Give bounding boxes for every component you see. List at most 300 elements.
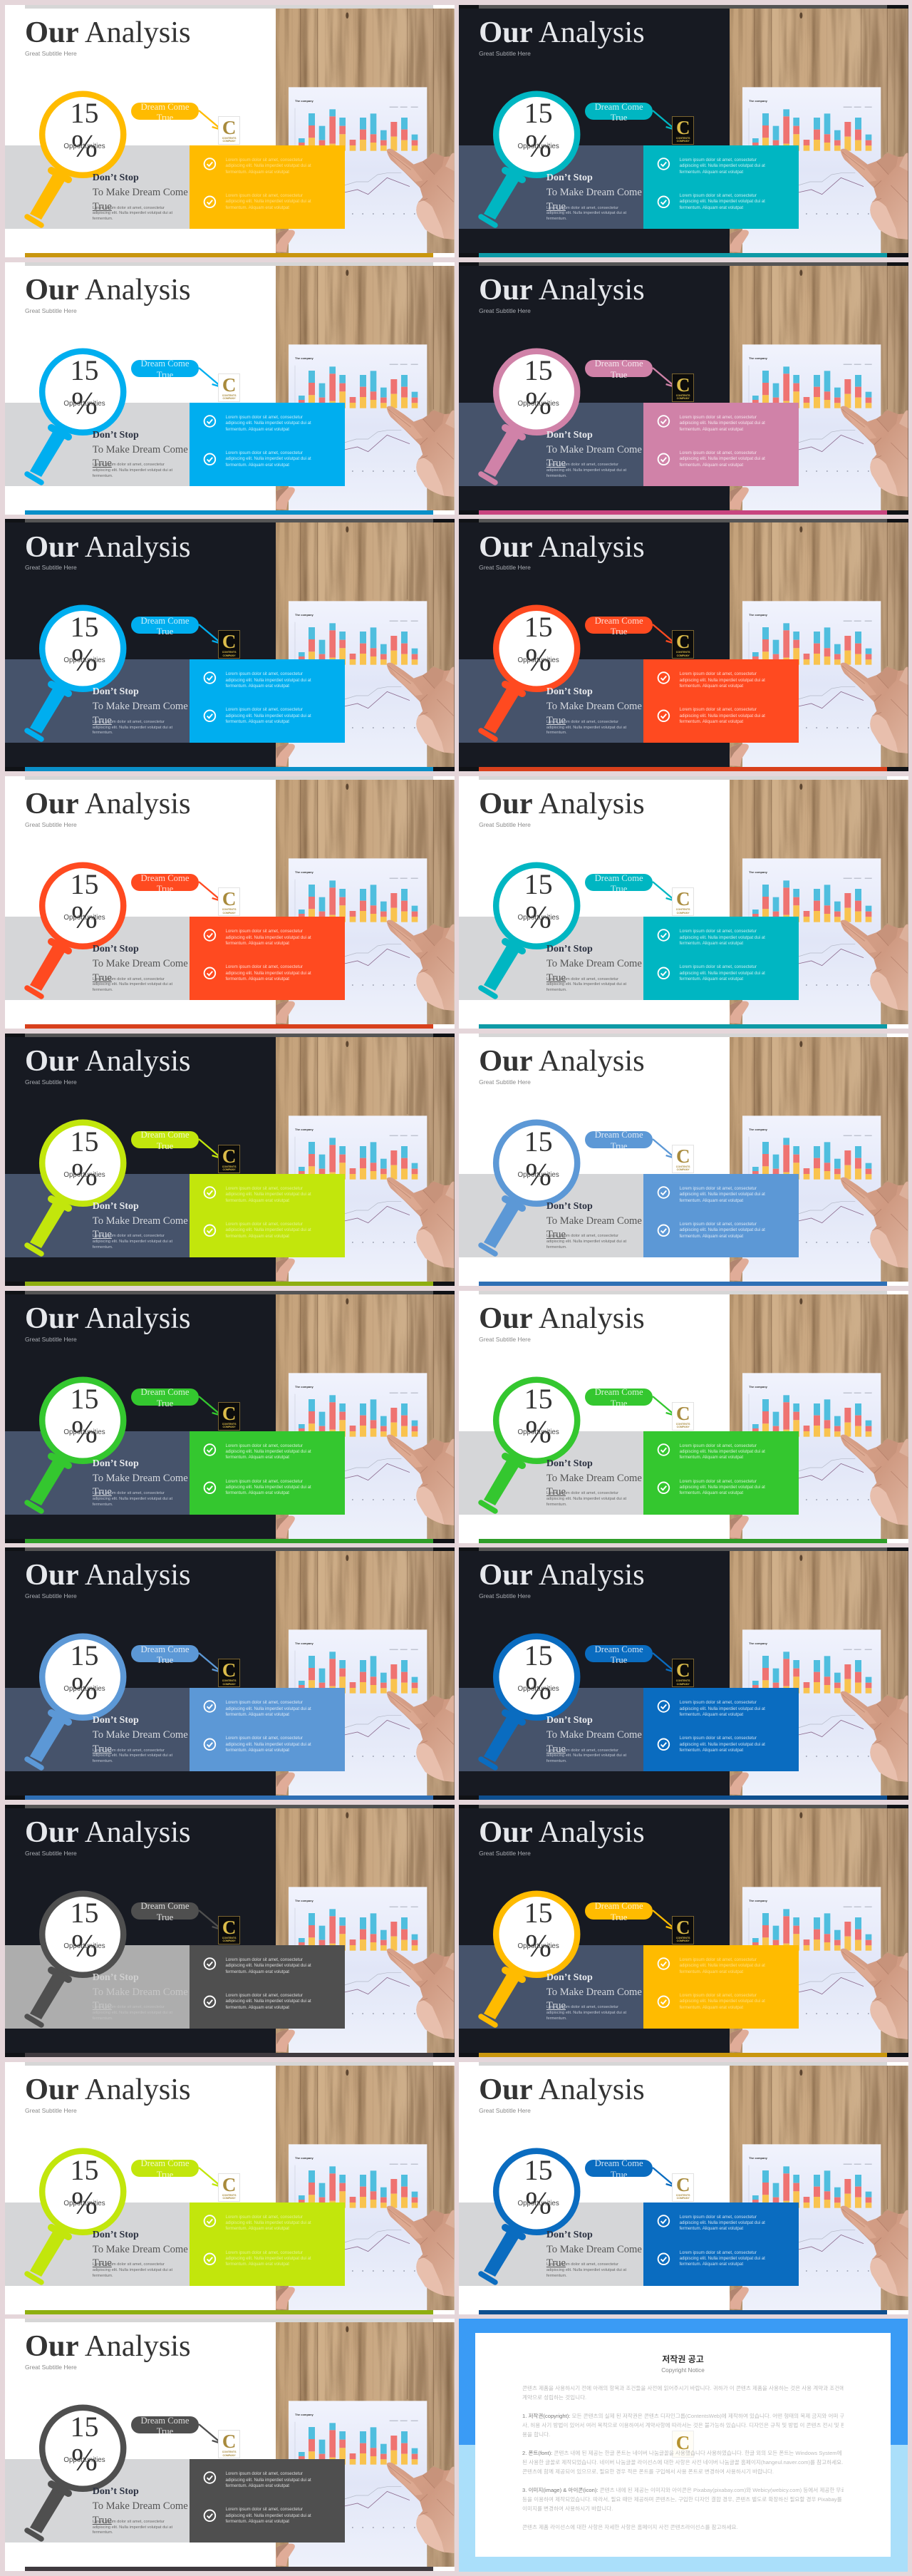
text: item 2: fermentum. Aliquam erat volutpat (225, 1748, 289, 1753)
label: Opportunities (517, 1428, 559, 1436)
text: item 1 (225, 1957, 332, 1975)
arrow (4, 2319, 455, 2571)
text: body: Lorem ipsum dolor sit amet, consectetur adipiscing elit. Nulla imperdiet volutpat dui at fermentum. (93, 2005, 172, 2021)
text: item 1: Lorem ipsum dolor sit amet, consectetur (225, 158, 303, 163)
text: to make (93, 1986, 188, 2014)
text: item 1: Lorem ipsum dolor sit amet, consectetur (225, 1443, 303, 1448)
text: item 1: adipiscing elit. Nulla imperdiet volutpat dui at (225, 1449, 311, 1454)
subtitle: Great Subtitle Here (479, 1592, 531, 1599)
icon: logo (672, 1659, 694, 1687)
icon: logo: CONTENTS (676, 1423, 690, 1426)
text: item 2 (680, 2250, 787, 2268)
clause 1 line 3: 용을 합니다. (522, 2431, 550, 2438)
text: body: Lorem ipsum dolor sit amet, consectetur adipiscing elit. Nulla imperdiet volutpat dui at fermentum. (546, 1234, 626, 1250)
panel: slide 4 pink on dark (459, 262, 908, 515)
text: item 1: Lorem ipsum dolor sit amet, consectetur (225, 2471, 303, 2476)
text: item 1: adipiscing elit. Nulla imperdiet volutpat dui at (680, 935, 765, 939)
callout text (585, 1130, 653, 1152)
callout text (595, 359, 643, 380)
text: item 2: fermentum. Aliquam erat volutpat (225, 2262, 289, 2267)
text: item 2: adipiscing elit. Nulla imperdiet volutpat dui at (225, 199, 311, 204)
text: item 1: Lorem ipsum dolor sit amet, consectetur (225, 1186, 303, 1191)
icon: magnifier (4, 1034, 455, 1286)
icon: magnifier (4, 1547, 455, 1800)
text: item 1 (680, 1700, 787, 1718)
icon: logo (218, 1401, 240, 1430)
number: 15 (524, 97, 553, 129)
text: item 2 (680, 707, 787, 726)
icons: checks (459, 1290, 908, 1542)
text: to make (93, 444, 188, 469)
photo: hand pointing at chart (276, 266, 455, 510)
callout text: Dream Come (141, 101, 190, 111)
callout text: True (157, 884, 173, 894)
text: item 1: adipiscing elit. Nulla imperdiet volutpat dui at (225, 2478, 311, 2483)
label: Opportunities (63, 400, 105, 408)
arrow (459, 1547, 908, 1800)
text: item 2: fermentum. Aliquam erat volutpat (225, 2005, 289, 2010)
accent box (190, 1431, 345, 1514)
text: body: Lorem ipsum dolor sit amet, consectetur adipiscing elit. Nulla imperdiet volutpat dui at fermentum. (546, 977, 626, 992)
label: Opportunities (63, 1171, 105, 1179)
text: item 1: adipiscing elit. Nulla imperdiet volutpat dui at (680, 1706, 765, 1711)
photo: hand pointing at chart (276, 522, 455, 767)
text: item 2: Lorem ipsum dolor sit amet, consectetur (225, 707, 303, 712)
subtitle: Great Subtitle Here (25, 821, 77, 828)
icon: logo (672, 1916, 694, 1944)
icon: logo: CONTENTS (676, 1679, 690, 1682)
text: item 1 (225, 929, 332, 947)
text: body: Lorem ipsum dolor sit amet, consectetur adipiscing elit. Nulla imperdiet volutpat dui at fermentum. (93, 720, 172, 735)
number: 15 (70, 1897, 98, 1929)
callout text (131, 1387, 199, 1409)
number: 15 (70, 354, 98, 386)
number: 15 (524, 1125, 553, 1158)
photo: hand pointing at chart: The company (749, 2156, 767, 2160)
arrow (4, 776, 455, 1029)
photo: hand pointing at chart: The company (295, 613, 314, 617)
number: 15 (70, 2154, 98, 2186)
text: item 2 (225, 964, 332, 982)
photo: hand pointing at chart (276, 1294, 455, 1538)
label: Opportunities (63, 143, 105, 150)
callout text (585, 1901, 653, 1923)
icon: logo (672, 116, 694, 145)
text: item 2: adipiscing elit. Nulla imperdiet volutpat dui at (225, 1999, 311, 2004)
icon: logo: CONTENTS (222, 1165, 236, 1168)
icon: logo (218, 1916, 240, 1944)
band (459, 145, 644, 229)
callout text: True (157, 1398, 173, 1408)
label: Opportunities (63, 2200, 105, 2207)
text: item 1 (225, 415, 311, 432)
callout text: True (157, 627, 173, 637)
icons: checks (459, 519, 908, 771)
text: item 1 (680, 1186, 787, 1204)
callout text: True (611, 1141, 627, 1151)
icon: logo: COMPANY (677, 1168, 690, 1171)
text: body: Lorem ipsum dolor sit amet, consectetur adipiscing elit. Nulla imperdiet volutpat dui at fermentum. (546, 1748, 626, 1763)
text: item 2: fermentum. Aliquam erat volutpat (225, 977, 289, 982)
text: don't stop: Don’t Stop (546, 1972, 593, 1983)
callout text: Dream Come (141, 616, 190, 626)
text: item 2 (680, 1478, 787, 1497)
number: 15 (524, 1383, 553, 1414)
subtitle: Great Subtitle Here (25, 1336, 77, 1343)
text: to make: True (93, 2000, 112, 2011)
text: item 2: adipiscing elit. Nulla imperdiet volutpat dui at (225, 2513, 311, 2518)
callout text: Dream Come (141, 1387, 190, 1397)
band (4, 2459, 190, 2542)
text: item 1: adipiscing elit. Nulla imperdiet volutpat dui at (225, 1192, 311, 1197)
text: to make: To Make Dream Come (93, 444, 188, 455)
band (459, 1174, 644, 1257)
icon: logo (218, 2430, 240, 2458)
text: to make (546, 700, 642, 728)
panel: slide 18 navy blue on white (459, 2062, 908, 2314)
percent: % (525, 1671, 551, 1706)
subtitle: Great Subtitle Here (25, 2364, 77, 2371)
text: don't stop: Don’t Stop (546, 686, 593, 697)
icon: watermark logo: C (676, 2432, 690, 2453)
text: item 1: fermentum. Aliquam erat volutpat (680, 941, 743, 946)
text: don't stop: Don’t Stop (546, 172, 593, 183)
text: to make (546, 2243, 642, 2271)
percent: % (71, 642, 98, 677)
icon: logo: COMPANY (677, 2197, 690, 2200)
photo: hand pointing at chart: The company (749, 1899, 767, 1902)
number: 15 (70, 611, 98, 643)
arrow (4, 1805, 455, 2057)
photo: hand pointing at chart: The company (749, 870, 767, 874)
text: item 2: adipiscing elit. Nulla imperdiet volutpat dui at (225, 713, 311, 718)
photo: hand pointing at chart (276, 9, 455, 253)
panel: slide 6 red on dark (459, 519, 908, 771)
callout text: True (157, 113, 173, 123)
callout text: Dream Come (595, 359, 643, 369)
text: item 2: Lorem ipsum dolor sit amet, consectetur (225, 1993, 303, 1998)
arrow (4, 1034, 455, 1286)
photo: hand pointing at chart (276, 2066, 455, 2310)
panel: slide 5 blue on dark (4, 519, 455, 771)
callout pill (585, 1645, 653, 1662)
text: item 2 (225, 193, 311, 210)
label: Opportunities (63, 656, 105, 664)
text: item 1: fermentum. Aliquam erat volutpat (680, 2226, 743, 2231)
text: item 1 (225, 158, 311, 175)
accent box (190, 145, 345, 229)
text: item 2: Lorem ipsum dolor sit amet, consectetur (680, 2250, 757, 2255)
accent box (190, 1688, 345, 1771)
text: to make (93, 1471, 188, 1500)
accent box (190, 917, 345, 1000)
text: item 2 (680, 1736, 787, 1753)
callout pill (585, 1131, 653, 1148)
text: item 1: Lorem ipsum dolor sit amet, consectetur (680, 415, 757, 420)
icon: logo: CONTENTS (676, 651, 690, 654)
label: Opportunities (63, 1942, 105, 1950)
percent: % (525, 1157, 551, 1192)
text: item 1: fermentum. Aliquam erat volutpat (225, 941, 289, 946)
subtitle: Great Subtitle Here (25, 1592, 77, 1599)
subtitle: Great Subtitle Here (25, 1078, 77, 1086)
subtitle: Great Subtitle Here (25, 2107, 77, 2114)
percent: % (525, 1928, 551, 1963)
callout pill (585, 874, 653, 891)
text: to make: True (93, 715, 112, 726)
photo: hand pointing at chart (730, 1294, 908, 1538)
callout text (131, 1644, 199, 1666)
percent: % (71, 2185, 98, 2220)
accent box (190, 1174, 345, 1257)
white card (475, 2333, 891, 2557)
text: to make: To Make Dream Come (93, 1215, 188, 1227)
text: item 2: fermentum. Aliquam erat volutpat (225, 462, 289, 468)
photo: hand pointing at chart (730, 522, 908, 767)
text: item 2 (225, 1478, 332, 1497)
icons: checks (4, 2062, 455, 2314)
text: item 1: Lorem ipsum dolor sit amet, consectetur (225, 671, 303, 676)
heading: Our Analysis (479, 1302, 645, 1335)
text: to make: To Make Dream Come (546, 1987, 642, 1998)
text: body: Lorem ipsum dolor sit amet, consectetur adipiscing elit. Nulla imperdiet volutpat dui at fermentum. (93, 1491, 172, 1507)
text: item 2: fermentum. Aliquam erat volutpat (680, 1490, 743, 1495)
icon: logo: C (676, 1659, 690, 1681)
text: to make: To Make Dream Come (546, 1729, 642, 1741)
photo: hand pointing at chart (730, 266, 908, 510)
band (4, 2203, 190, 2286)
icon: logo: CONTENTS (676, 2194, 690, 2197)
panel: slide 14 navy blue on dark (459, 1547, 908, 1800)
text: body: Lorem ipsum dolor sit amet, consectetur adipiscing elit. Nulla imperdiet volutpat dui at fermentum. (546, 2262, 626, 2278)
text: to make: True (93, 201, 112, 212)
number: 15 (70, 2411, 98, 2443)
icon: logo: COMPANY (223, 1426, 236, 1428)
text: don't stop: Don’t Stop (546, 1201, 593, 1212)
photo: hand pointing at chart: The company (749, 1642, 767, 1645)
arrow (4, 2062, 455, 2314)
percent: % (525, 386, 551, 421)
icon: logo (218, 1659, 240, 1687)
text: item 2: Lorem ipsum dolor sit amet, consectetur (225, 450, 303, 455)
text: item 1: Lorem ipsum dolor sit amet, consectetur (225, 1957, 303, 1962)
callout text (131, 2416, 199, 2438)
arrow (459, 1290, 908, 1542)
icon: logo: COMPANY (223, 397, 236, 400)
label: Opportunities (63, 1685, 105, 1693)
callout pill (585, 2160, 653, 2177)
clause 2 line 3: 콘텐츠에 함께 제공되어 있으므로, 필요한 경우 적은 폰트를 구입해서 사용 폰트로 변경하여 사용하시기 바랍니다. (522, 2468, 774, 2475)
heading: Our Analysis (25, 273, 191, 306)
number: 15 (70, 1125, 98, 1158)
callout text: True (611, 113, 627, 123)
text: don't stop: Don’t Stop (93, 1972, 139, 1983)
text: item 2: fermentum. Aliquam erat volutpat (225, 1234, 289, 1239)
text: item 1 (225, 1700, 332, 1718)
subtitle: Great Subtitle Here (479, 821, 531, 828)
text: item 2: adipiscing elit. Nulla imperdiet volutpat dui at (680, 1999, 765, 2004)
icon: magnifier (4, 2319, 455, 2571)
panel: slide 2 teal on dark (459, 5, 908, 257)
accent box (643, 1945, 799, 2029)
closing line: 콘텐츠 제품 라이선스에 대한 사항은 자세한 사항은 홈페이지 사전 콘텐츠라이선스를 참고하세요. (522, 2524, 738, 2530)
icon: logo: C (676, 2174, 690, 2195)
text: item 2: Lorem ipsum dolor sit amet, consectetur (225, 2250, 303, 2255)
arrow (459, 519, 908, 771)
text: item 1: Lorem ipsum dolor sit amet, consectetur (225, 929, 303, 934)
label: Opportunities (517, 1685, 559, 1693)
icon: logo: CONTENTS (676, 908, 690, 911)
callout text: True (157, 2170, 173, 2180)
text: body: Lorem ipsum dolor sit amet, consectetur adipiscing elit. Nulla imperdiet volutpat dui at fermentum. (93, 205, 172, 221)
band (459, 659, 644, 743)
text: item 2: Lorem ipsum dolor sit amet, consectetur (225, 193, 303, 198)
callout text: Dream Come (141, 2416, 190, 2426)
icon: logo: C (222, 1145, 236, 1167)
icon: logo: COMPANY (223, 911, 236, 914)
photo: hand pointing at chart: The company (295, 2156, 314, 2160)
text: item 1: fermentum. Aliquam erat volutpat (680, 1198, 743, 1203)
text: item 1 (680, 2215, 787, 2232)
icon: magnifier (4, 1290, 455, 1542)
icon: logo: C (222, 374, 236, 396)
text: item 1: Lorem ipsum dolor sit amet, consectetur (680, 1186, 757, 1191)
number: 15 (70, 1383, 98, 1414)
text: to make: True (546, 458, 566, 469)
text: to make (546, 187, 642, 212)
label: Opportunities (517, 1171, 559, 1179)
text: don't stop: Don’t Stop (93, 2230, 139, 2240)
arrow (459, 1805, 908, 2057)
text: item 1: fermentum. Aliquam erat volutpat (225, 1455, 289, 1460)
band (459, 1945, 644, 2029)
callout pill (131, 2160, 199, 2177)
callout text: Dream Come (141, 1130, 190, 1140)
text: don't stop: Don’t Stop (93, 1715, 139, 1726)
text: item 1 (225, 1186, 332, 1204)
percent: % (71, 900, 98, 934)
photo: hand pointing at chart (730, 9, 908, 253)
icon: logo: CONTENTS (222, 651, 236, 654)
text: to make: True (93, 2257, 112, 2269)
callout text: Dream Come (141, 1901, 190, 1911)
text: to make (546, 444, 642, 469)
photo: hand pointing at chart: The company (295, 356, 314, 360)
text: item 2: adipiscing elit. Nulla imperdiet volutpat dui at (680, 1485, 765, 1490)
label: Opportunities (63, 2456, 105, 2464)
label: Opportunities (517, 2200, 559, 2207)
icon: logo: C (222, 1403, 236, 1424)
icon: logo: COMPANY (223, 2197, 236, 2200)
text: item 1 (225, 1443, 332, 1461)
callout text: True (157, 370, 173, 380)
text: item 2: adipiscing elit. Nulla imperdiet volutpat dui at (225, 971, 311, 975)
panel: slide 19 gray on white (4, 2319, 455, 2571)
icon: logo: COMPANY (223, 140, 236, 143)
band (4, 917, 190, 1000)
text: to make (93, 2500, 188, 2528)
subtitle: Great Subtitle Here (479, 2107, 531, 2114)
number: 15 (524, 868, 553, 900)
callout text (141, 359, 190, 380)
icon: logo: COMPANY (223, 1168, 236, 1171)
icon: logo (672, 1401, 694, 1430)
icon: logo: CONTENTS (222, 2194, 236, 2197)
text: to make: True (93, 972, 112, 984)
text: item 2: Lorem ipsum dolor sit amet, consectetur (680, 450, 757, 455)
text: item 1: adipiscing elit. Nulla imperdiet volutpat dui at (225, 935, 311, 939)
text: item 1 (680, 671, 787, 690)
text: item 2: fermentum. Aliquam erat volutpat (680, 719, 743, 724)
accent box (643, 1431, 799, 1514)
heading: Our Analysis (25, 2073, 191, 2106)
text: item 2: adipiscing elit. Nulla imperdiet volutpat dui at (680, 713, 765, 718)
photo: hand pointing at chart (730, 780, 908, 1024)
band (459, 403, 644, 486)
arrow (459, 1034, 908, 1286)
photo: hand pointing at chart: The company (749, 613, 767, 617)
photo: hand pointing at chart (276, 2322, 455, 2567)
text: item 2: adipiscing elit. Nulla imperdiet volutpat dui at (680, 2256, 765, 2261)
callout text (141, 101, 190, 123)
accent box (643, 2203, 799, 2286)
text: to make: To Make Dream Come (546, 187, 642, 198)
text: item 1: fermentum. Aliquam erat volutpat (225, 2483, 289, 2488)
label: Opportunities (517, 1942, 559, 1950)
panel: slide 7 red on white (4, 776, 455, 1029)
percent: % (71, 386, 98, 421)
icon: magnifier (4, 2062, 455, 2314)
band (4, 403, 190, 486)
icon: logo (218, 887, 240, 916)
text: item 1: adipiscing elit. Nulla imperdiet volutpat dui at (225, 678, 311, 683)
band (459, 1431, 644, 1514)
text: to make: To Make Dream Come (93, 958, 188, 969)
number: 15 (524, 1897, 553, 1929)
panel: slide 11 green on dark (4, 1290, 455, 1542)
number: 15 (70, 868, 98, 900)
heading: Our Analysis (25, 16, 191, 49)
text: to make: To Make Dream Come (546, 1473, 642, 1484)
text: item 1: fermentum. Aliquam erat volutpat (680, 1969, 743, 1974)
text: don't stop: Don’t Stop (93, 944, 139, 954)
text: don't stop: Don’t Stop (93, 1458, 139, 1468)
icon: logo: COMPANY (677, 911, 690, 914)
text: to make: True (546, 1486, 566, 1498)
icons: checks (4, 1034, 455, 1286)
callout text (585, 2158, 653, 2180)
arrow (653, 110, 672, 130)
panel: slide 12 green on white (459, 1290, 908, 1542)
text: item 2: fermentum. Aliquam erat volutpat (680, 205, 743, 210)
text: don't stop: Don’t Stop (93, 1201, 139, 1212)
icon: logo (218, 373, 240, 402)
icon: magnifier (24, 348, 127, 485)
band (4, 1431, 190, 1514)
icon: magnifier (459, 1547, 908, 1800)
icons: checks (4, 1290, 455, 1542)
text: item 2: Lorem ipsum dolor sit amet, consectetur (680, 193, 757, 198)
percent: % (525, 128, 551, 163)
text: to make: True (546, 2000, 566, 2011)
icon: magnifier (24, 91, 127, 228)
photo: hand pointing at chart (276, 1037, 455, 1282)
percent: % (71, 128, 98, 163)
icon: logo: CONTENTS (222, 1679, 236, 1682)
heading: Our Analysis (479, 1558, 645, 1592)
number: 15 (524, 2154, 553, 2186)
callout text: True (157, 1141, 173, 1151)
